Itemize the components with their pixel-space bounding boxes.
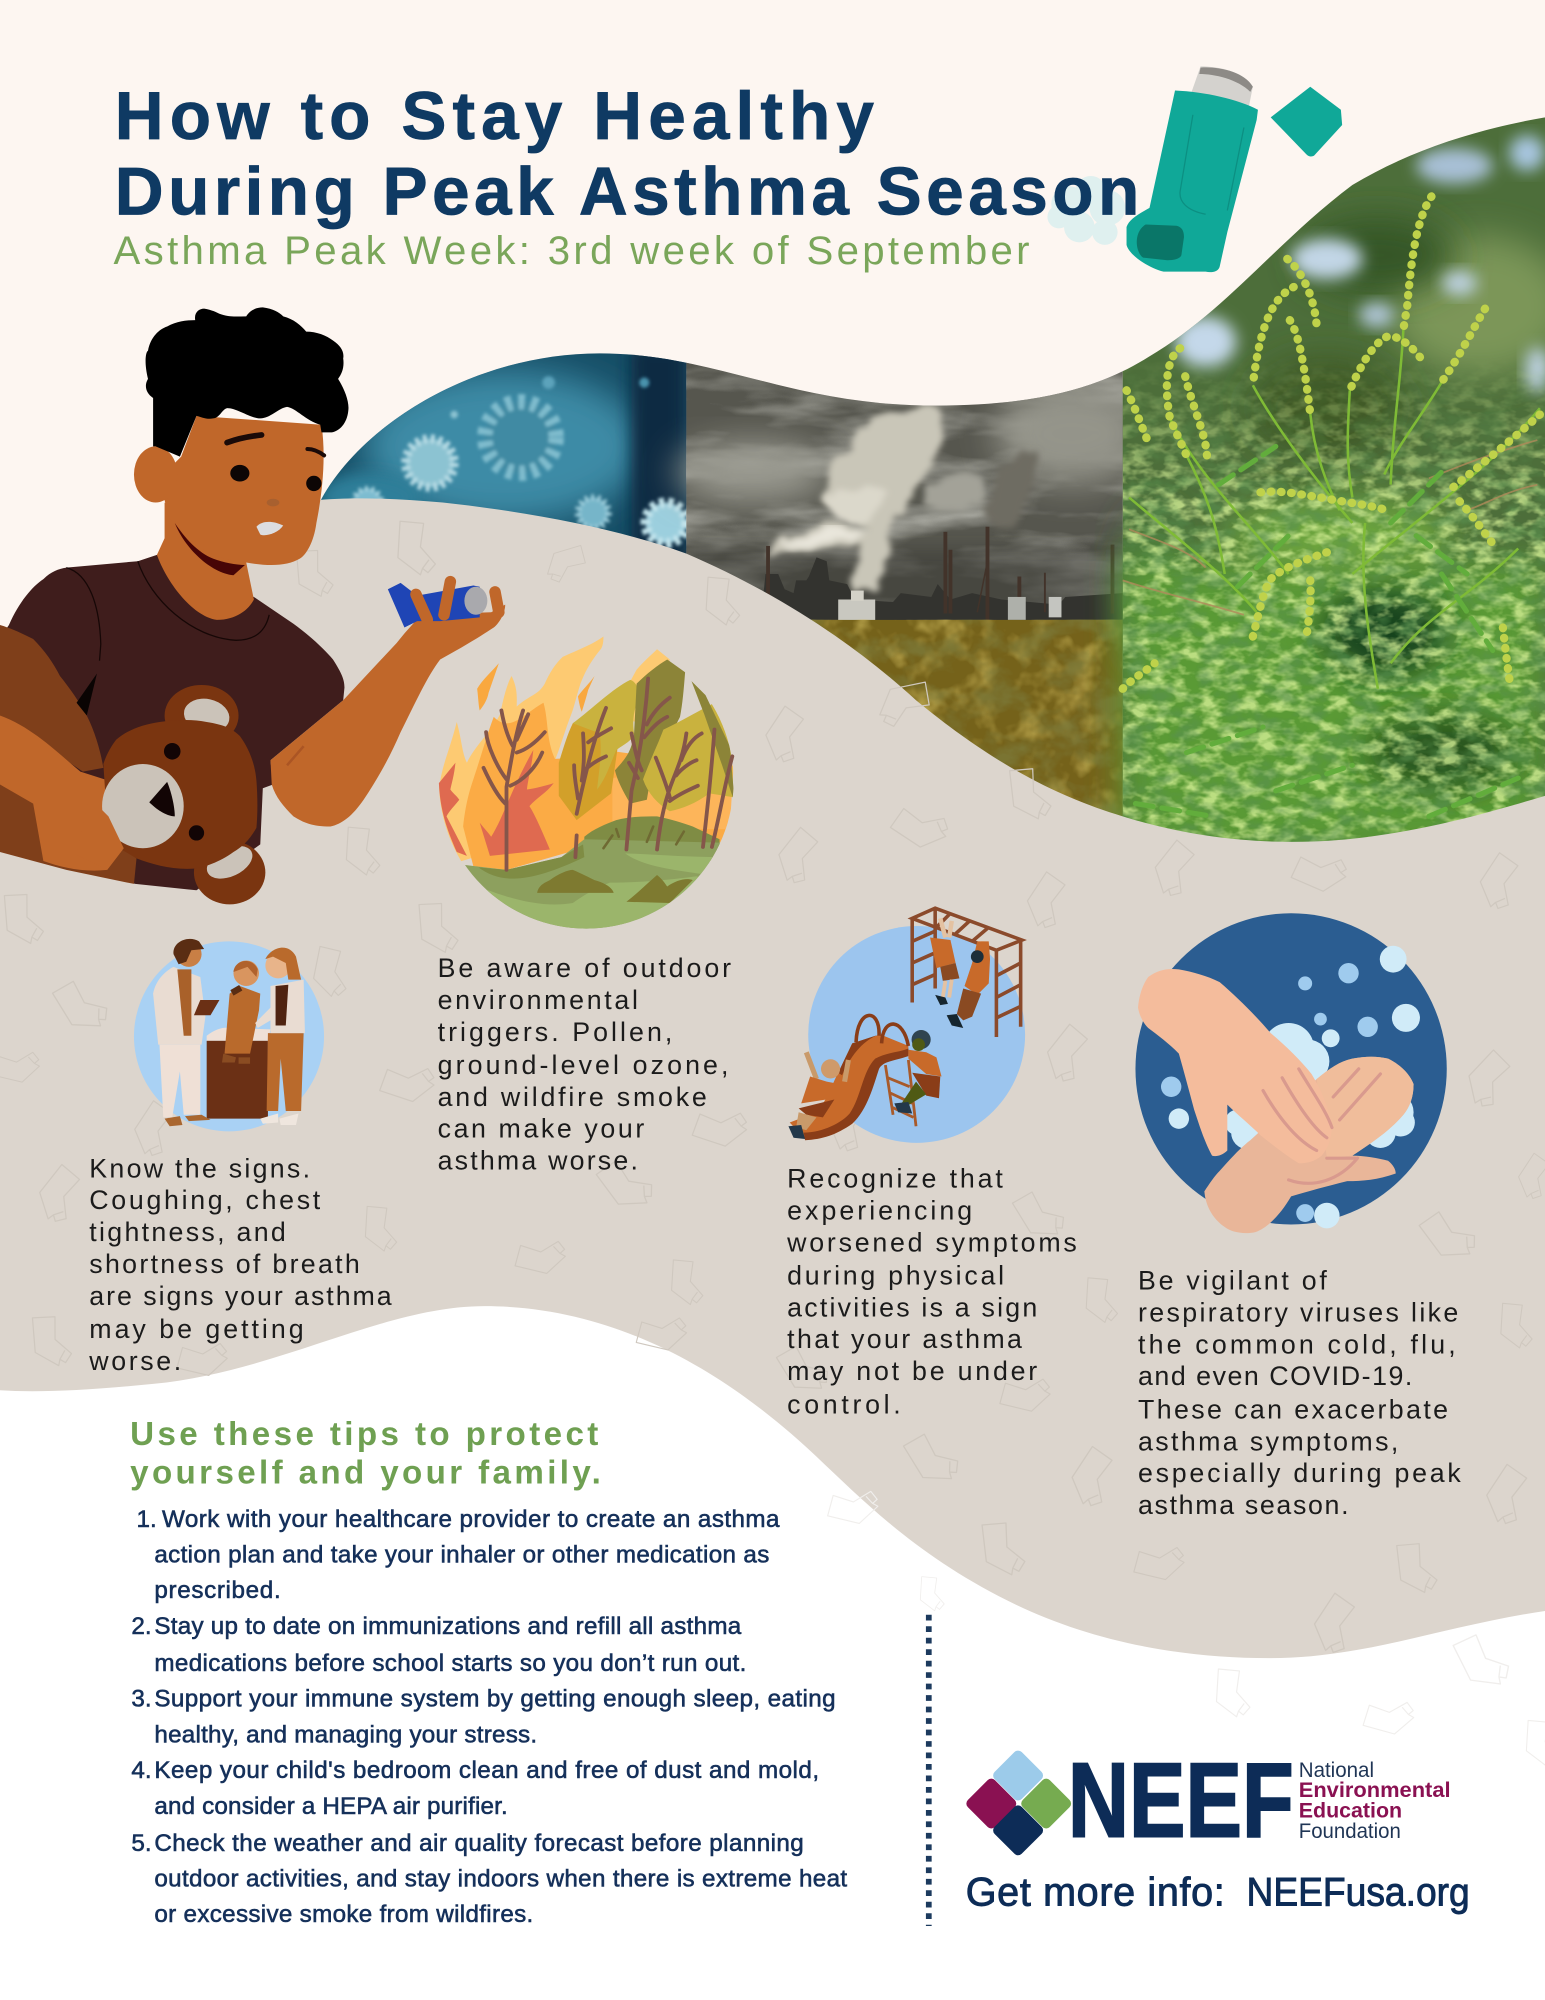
text block: physical activities: during physical	[787, 1260, 1004, 1290]
text block: outdoor triggers: asthma worse.	[438, 1146, 638, 1176]
hanging children	[930, 918, 990, 1028]
shirt	[0, 555, 344, 890]
text block: respiratory viruses	[1138, 1266, 1461, 1520]
numbered tips list: outdoor activities, and stay indoors when there is extreme heat	[154, 1865, 847, 1892]
numbered tips list: 2.	[131, 1613, 152, 1640]
numbered tips list: and consider a HEPA air purifier.	[154, 1793, 508, 1820]
numbered tips list: Work with your healthcare provider to create an asthma	[162, 1506, 780, 1533]
puff of medicine	[1047, 176, 1125, 245]
inhaler canister	[1192, 66, 1253, 112]
text block: know the signs: Coughing, chest	[89, 1185, 321, 1215]
upper hand	[1138, 969, 1332, 1163]
text block: know the signs: may be getting	[89, 1314, 304, 1344]
finger lines	[1263, 1069, 1380, 1183]
text block: outdoor triggers: Be aware of outdoor	[438, 953, 731, 983]
doctor	[153, 939, 219, 1126]
numbered tips list: 4.	[131, 1757, 152, 1784]
text block: physical activities	[786, 1164, 1077, 1419]
numbered tips list: 1.	[137, 1506, 157, 1533]
illustration: washing hands with soap	[1135, 913, 1447, 1233]
face	[159, 416, 324, 565]
heading: tips: yourself and your family.	[130, 1454, 601, 1491]
text block: respiratory viruses: especially during peak	[1138, 1458, 1461, 1488]
text block: physical activities: Recognize that	[787, 1164, 1003, 1193]
numbered tips list: 5.	[131, 1830, 152, 1857]
child on ladder	[894, 1030, 942, 1114]
numbered tips list: 3.	[131, 1686, 152, 1713]
illustration: boy with inhaler and teddy bear	[0, 307, 505, 904]
text block: respiratory viruses: asthma symptoms,	[1138, 1426, 1398, 1456]
eyes and brows	[227, 435, 324, 491]
examination table	[207, 1028, 270, 1119]
numbered tips list: medications before school starts so you don’t run out.	[154, 1650, 746, 1677]
teddy bear	[102, 685, 265, 904]
inhaler cap	[1271, 87, 1342, 156]
lower hand	[1204, 1057, 1414, 1233]
ground	[465, 816, 720, 929]
text block: physical activities: worsened symptoms	[786, 1227, 1077, 1257]
illustration: children at playground	[788, 908, 1025, 1143]
title	[115, 79, 1139, 229]
hand holding bear	[0, 716, 124, 871]
photo: virus particles	[321, 353, 694, 554]
flames	[439, 636, 734, 870]
nose and mouth	[267, 499, 279, 506]
fingers over bear	[77, 797, 124, 870]
hair	[146, 307, 348, 457]
background pattern on white	[827, 1485, 1545, 1765]
photo band: virus, factory smoke, ragweed	[306, 115, 1545, 855]
logo foundation name: Foundation	[1299, 1820, 1401, 1843]
heading: tips: Use these tips to protect	[130, 1416, 598, 1453]
text block: know the signs: are signs your asthma	[89, 1281, 392, 1311]
text block: outdoor triggers: and wildfire smoke	[438, 1082, 707, 1112]
chin shadow	[175, 523, 245, 575]
text block: physical activities: activities is a sign	[787, 1292, 1037, 1322]
dark arm	[0, 625, 103, 772]
text block: respiratory viruses: the common cold, flu,	[1138, 1329, 1456, 1359]
logo foundation name: National	[1299, 1759, 1374, 1782]
logo foundation name: Environmental	[1299, 1779, 1451, 1802]
small inhaler in hand	[388, 582, 499, 628]
child	[222, 960, 260, 1064]
autumn trees	[559, 659, 735, 820]
text block: outdoor triggers: can make your	[438, 1114, 644, 1144]
text block: know the signs: worse.	[88, 1346, 181, 1376]
text block: respiratory viruses: and even COVID-19.	[1138, 1361, 1412, 1391]
collar line and sleeve seam	[66, 561, 269, 661]
call to action	[966, 1871, 1470, 1915]
text block: outdoor triggers: triggers. Pollen,	[438, 1017, 672, 1047]
monkey bars	[912, 908, 1022, 1027]
ladder	[885, 1060, 916, 1126]
call to action: Get more info:	[966, 1871, 1225, 1915]
tree trunks	[484, 679, 732, 870]
logo foundation name: Education	[1299, 1800, 1402, 1823]
numbered tips list: healthy, and managing your stress.	[154, 1721, 537, 1748]
soap foam	[1169, 946, 1420, 1228]
subtitle: Asthma Peak Week: 3rd week of September	[114, 228, 1030, 273]
neck	[157, 503, 254, 620]
text block: respiratory viruses: asthma season.	[1138, 1490, 1349, 1520]
logo foundation name	[1299, 1759, 1451, 1843]
illustration: wildfire in forest	[434, 636, 740, 938]
icon: inhaler with puff	[1047, 66, 1342, 272]
call to action: NEEFusa.org	[1246, 1871, 1470, 1915]
text block: know the signs	[88, 1153, 392, 1376]
text block: physical activities: control.	[787, 1389, 901, 1419]
numbered tips list: Check the weather and air quality forecast before planning	[154, 1830, 804, 1857]
text block: outdoor triggers: ground-level ozone,	[438, 1050, 728, 1080]
text block: physical activities: that your asthma	[787, 1324, 1022, 1354]
illustration: doctor, child and parent	[134, 939, 324, 1131]
wooded foreground	[812, 620, 1123, 816]
dark smoke	[986, 446, 1035, 527]
text block: know the signs: shortness of breath	[89, 1249, 360, 1279]
numbered tips list	[131, 1506, 847, 1928]
text block: physical activities: experiencing	[787, 1195, 972, 1225]
NEEF logo	[964, 1742, 1451, 1860]
raised arm	[270, 605, 505, 827]
text block: outdoor triggers: environmental	[438, 985, 638, 1015]
numbered tips list: Stay up to date on immunizations and refill all asthma	[154, 1613, 742, 1640]
text block: respiratory viruses: respiratory viruses like	[1138, 1297, 1458, 1327]
logo wordmark: NEEF	[1068, 1742, 1294, 1860]
ear	[134, 446, 177, 503]
background pattern: inhaler outlines	[0, 521, 1545, 1658]
child on slide	[788, 1052, 848, 1139]
beige wave background	[0, 498, 1545, 1658]
text block: outdoor triggers	[438, 953, 731, 1176]
numbered tips list: action plan and take your inhaler or other medication as	[154, 1542, 769, 1568]
white smoke plume	[765, 408, 943, 589]
parent	[255, 948, 305, 1125]
slide	[790, 1015, 908, 1140]
title: How to Stay Healthy	[115, 79, 874, 154]
inhaler body	[1127, 91, 1258, 272]
logo diamonds	[964, 1748, 1073, 1857]
numbered tips list: Support your immune system by getting enough sleep, eating	[154, 1686, 836, 1713]
numbered tips list: prescribed.	[154, 1577, 281, 1604]
numbered tips list: or excessive smoke from wildfires.	[154, 1901, 533, 1928]
text block: know the signs: Know the signs.	[89, 1153, 310, 1183]
heading: tips	[130, 1416, 601, 1491]
text block: respiratory viruses: These can exacerbate	[1138, 1394, 1448, 1424]
ragweed flower spikes	[1123, 196, 1540, 689]
photo: factory smoke	[656, 362, 1123, 816]
title: During Peak Asthma Season	[115, 154, 1139, 229]
photo: ragweed plant	[1121, 115, 1545, 855]
text block: physical activities: may not be under	[787, 1356, 1037, 1386]
right posts of bars	[996, 950, 1021, 1037]
text block: respiratory viruses: Be vigilant of	[1138, 1266, 1327, 1296]
skyline and chimneys	[764, 526, 1122, 620]
numbered tips list: Keep your child's bedroom clean and free of dust and mold,	[154, 1757, 819, 1784]
text block: know the signs: tightness, and	[89, 1217, 286, 1247]
lower body of arm	[0, 765, 137, 884]
